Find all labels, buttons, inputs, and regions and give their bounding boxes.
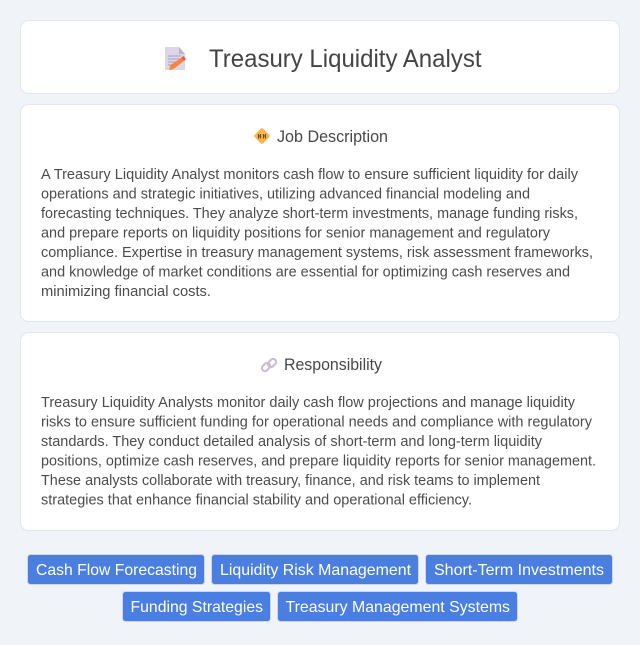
tag: treasury management systems: Treasury Management Systems [286, 599, 510, 616]
title: Treasury Liquidity Analyst [209, 45, 482, 73]
text block: responsibility: These analysts collaborate with treasury, finance, and risk teams to implement [41, 473, 540, 489]
text block: job description: compliance. Expertise in treasury management systems, risk assessment frameworks, [41, 245, 593, 261]
heading: job description: Job Description [277, 127, 388, 146]
text block: job description: operations and strategic initiatives, utilizing advanced financial modeling and [41, 186, 530, 202]
text block: job description: forecasting techniques. They analyze short-term investments, manage funding risks, [41, 206, 578, 222]
text block: job description: and prepare reports on liquidity positions for senior management and regulatory [41, 226, 551, 242]
text block: job description: minimizing financial costs. [41, 284, 211, 300]
text block: job description [41, 167, 593, 300]
tag: short-term investments [426, 554, 612, 584]
text block: responsibility: standards. They conduct detailed analysis of short-term and long-term liquidity [41, 434, 543, 450]
tag: treasury management systems [278, 592, 518, 622]
panel: job description [20, 104, 620, 322]
text block: responsibility: Treasury Liquidity Analysts monitor daily cash flow projections and manage liquidity [41, 395, 576, 411]
tag: liquidity risk management [212, 554, 418, 584]
icon: link [261, 358, 277, 372]
panel: responsibility [20, 332, 620, 530]
tag: cash flow forecasting: Cash Flow Forecasting [36, 562, 197, 579]
icon: document with pencil [165, 47, 186, 70]
text block: responsibility: positions, optimize cash reserves, and prepare liquidity reports for senior management. [41, 454, 596, 470]
tag: funding strategies: Funding Strategies [130, 599, 263, 616]
text block: responsibility: risks to ensure sufficient funding for operational needs and compliance with regulatory [41, 414, 593, 430]
heading: responsibility: Responsibility [284, 355, 383, 374]
text block: job description: A Treasury Liquidity Analyst monitors cash flow to ensure sufficient liquidity for daily [41, 167, 579, 183]
text block: responsibility: strategies that enhance financial stability and operational efficiency. [41, 492, 472, 508]
panel: header [20, 20, 620, 94]
text block: responsibility [41, 395, 596, 508]
tag: cash flow forecasting [28, 554, 204, 584]
tag: short-term investments: Short-Term Investments [434, 562, 604, 579]
tag list [28, 554, 612, 622]
tag: liquidity risk management: Liquidity Risk Management [220, 562, 412, 579]
text block: job description: and knowledge of market conditions are essential for optimizing cash reserves and [41, 264, 570, 280]
tag: funding strategies [122, 592, 270, 622]
icon: warning diamond [254, 128, 270, 144]
